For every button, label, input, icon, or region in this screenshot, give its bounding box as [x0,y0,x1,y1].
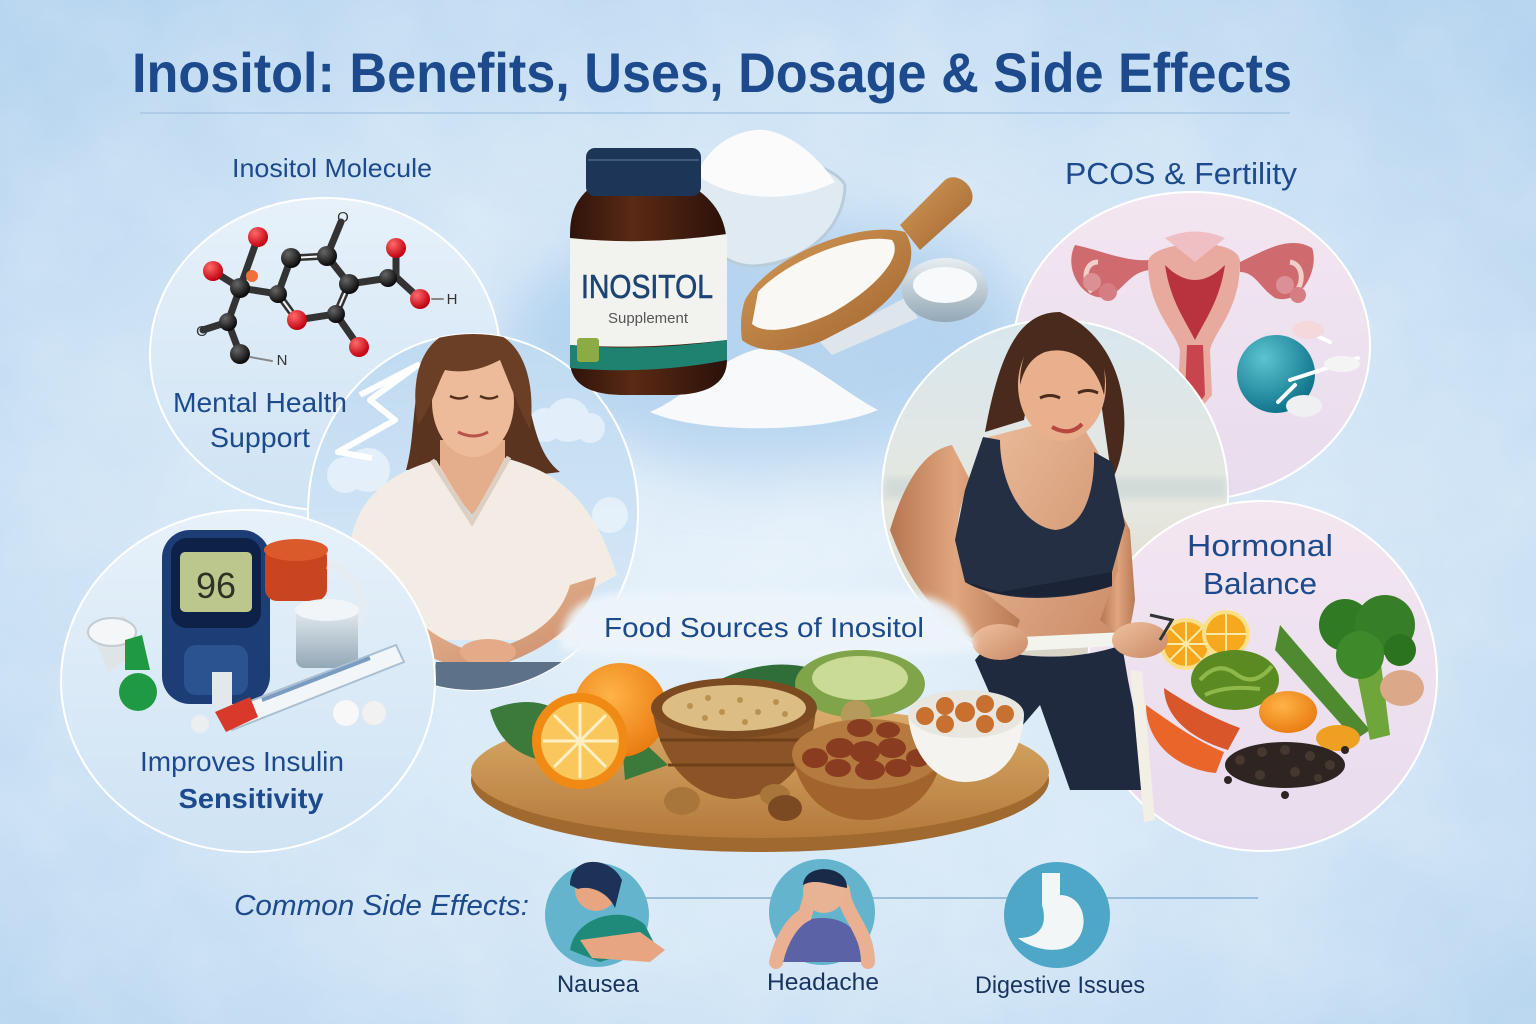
icon: molecule diagram: O [196,323,208,340]
leaves and produce [490,650,925,789]
label: Improves Insulin Sensitivity: Improves Insulin [140,746,344,777]
basket of grains [651,678,817,799]
bottle: Supplement [608,310,689,327]
panel: hormonal balance [1087,501,1437,851]
wooden scoop [741,177,973,350]
title: Inositol: Benefits, Uses, Dosage & Side Effects [132,41,1292,104]
label: Digestive Issues: Digestive Issues [975,972,1145,999]
icon: molecule diagram: O [337,209,349,226]
heading: Inositol Molecule: Inositol Molecule [232,153,432,183]
icon: glucose meter [162,530,270,706]
icon: nausea [545,862,665,967]
panel: PCOS and fertility [1014,192,1370,500]
label: Common Side Effects: Common Side Effects: [234,890,529,922]
heading: Hormonal Balance: Hormonal [1187,528,1333,563]
icon: headache [769,859,875,965]
heading: Hormonal Balance: Balance [1203,566,1317,601]
bowl of nuts [908,690,1024,782]
icon: insulin syringe [191,645,404,733]
bottle [570,148,727,395]
bowl of dates [792,719,942,820]
label: Improves Insulin Sensitivity: Sensitivity [178,783,324,814]
panel: woman meditating [308,328,638,700]
icon: uterus diagram [1071,232,1314,415]
scattered nuts [664,784,802,821]
heading: PCOS & Fertility: PCOS & Fertility [1065,156,1298,191]
panel: insulin sensitivity [61,510,435,852]
label: Mental Health Support: Support [210,422,310,453]
panel: food sources of inositol [471,593,1049,852]
figure: fit woman with measuring tape [890,312,1172,822]
icon: molecule diagram: N [277,352,287,369]
side effects strip [234,859,1258,999]
icon: bottle caps and vials [88,539,362,711]
icon: stomach [1004,862,1110,968]
panel: woman measuring waist [882,320,1228,666]
label: Nausea: Nausea [557,971,640,998]
bottle: INOSITOL [581,268,713,305]
measuring spoon [820,258,988,355]
icon: vegetables and fruit [1146,595,1424,799]
label: Headache: Headache [767,969,879,996]
wooden board [471,708,1049,852]
icon: egg and sperm cells [1237,321,1360,417]
figure: woman in white T-shirt [352,328,617,700]
panel: inositol molecule and mental health [150,198,500,510]
icon: molecule diagram: H [447,291,457,308]
icon: molecule diagram [196,209,457,369]
powder pile [650,348,878,428]
icon: glucose meter: 96 [196,565,236,606]
heading: Food Sources of Inositol: Food Sources of Inositol [604,612,924,643]
powder bowl [695,130,845,266]
label: Mental Health Support: Mental Health [173,387,347,418]
decoration: soft clouds and arrows [327,328,628,700]
product: supplement bottle and powder [570,130,988,428]
